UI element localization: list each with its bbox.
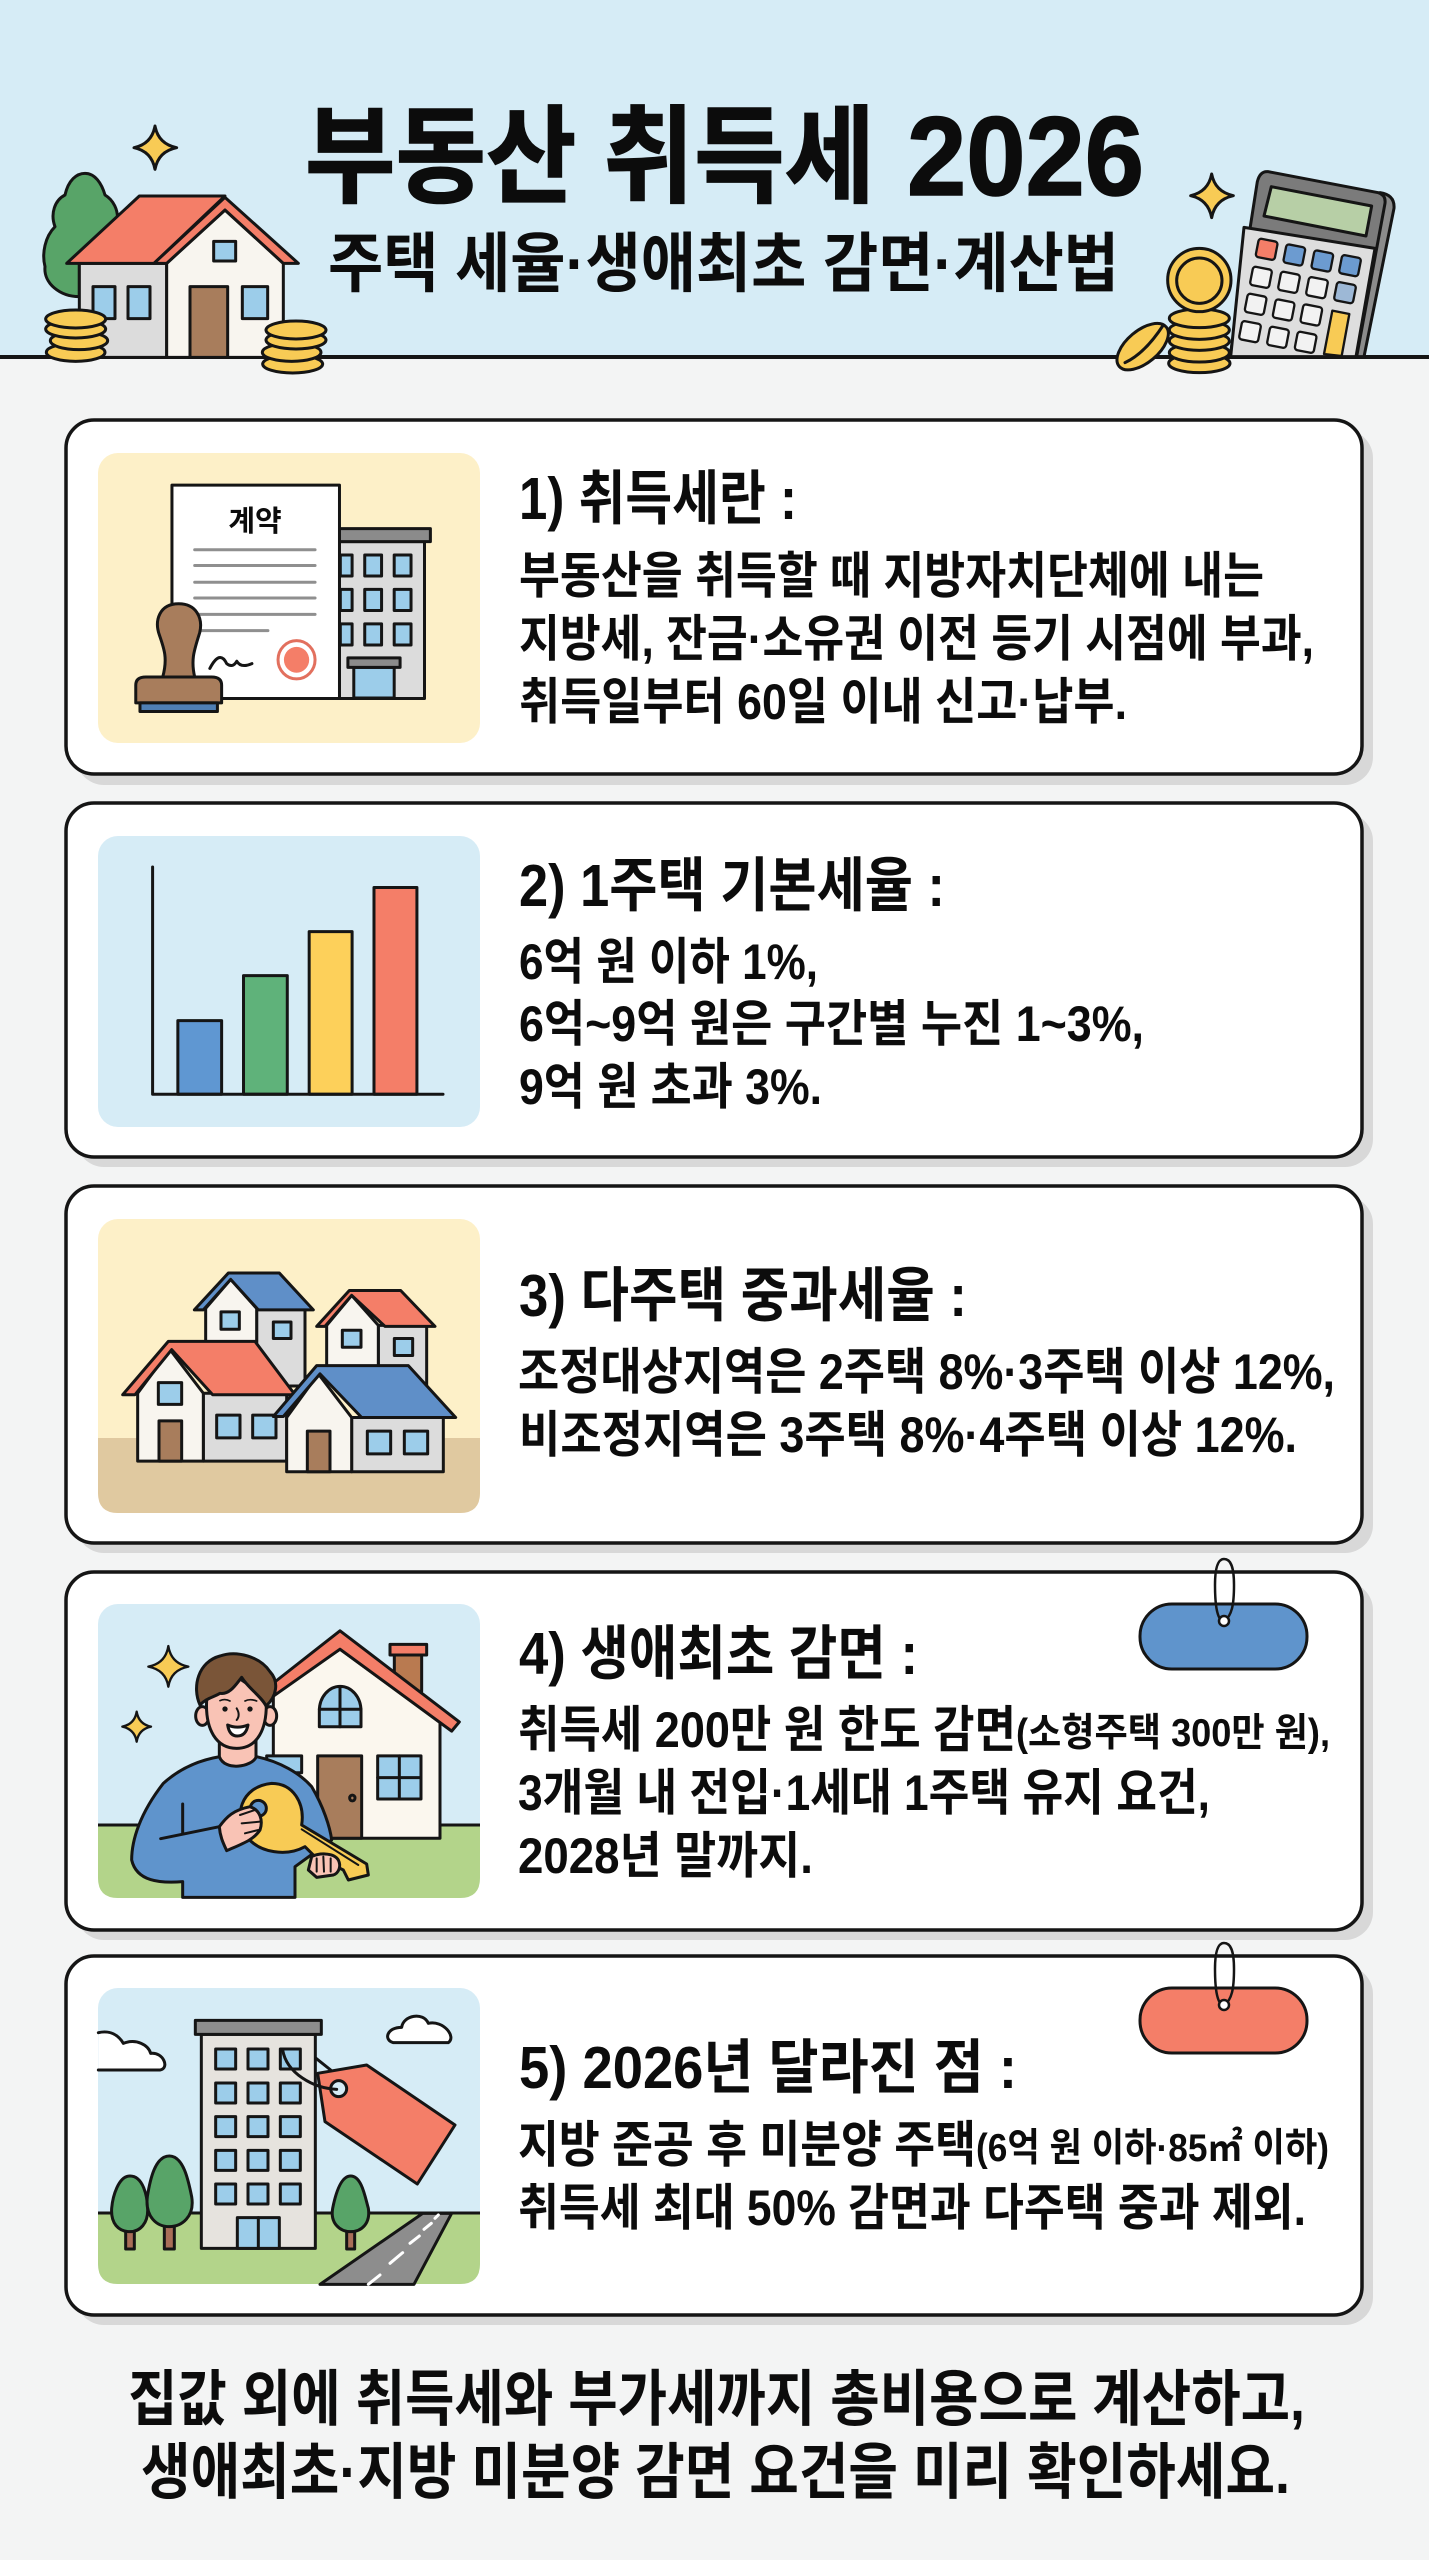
heading: card 4: 4) 생애최초 감면 :	[519, 1621, 918, 1687]
icon: red tag	[1140, 1943, 1307, 2053]
illustration: person with key and house	[98, 1604, 480, 1898]
footer message	[128, 2365, 1305, 2506]
illustration: contract and building	[98, 453, 480, 743]
icon: sparkle right	[1191, 174, 1233, 218]
text: card 2	[519, 934, 1144, 1115]
footer message: 집값 외에 취득세와 부가세까지 총비용으로 계산하고,	[128, 2365, 1305, 2433]
text: card 2: 6억 원 이하 1%,	[519, 934, 818, 990]
text: card 3: 비조정지역은 3주택 8%·4주택 이상 12%.	[519, 1407, 1297, 1463]
heading: card 5: 5) 2026년 달라진 점 :	[519, 2035, 1017, 2101]
figure: person holding key	[122, 1646, 368, 1897]
title	[305, 94, 1144, 219]
panel: card 4	[66, 1559, 1373, 1940]
bar chart	[98, 836, 480, 1127]
illustration: multiple houses	[98, 1219, 480, 1513]
icon: coins right	[262, 321, 326, 373]
text: card 5: 지방 준공 후 미분양 주택	[518, 2117, 976, 2173]
icon: house	[67, 196, 298, 357]
text: card 3: 조정대상지역은 2주택 8%·3주택 이상 12%,	[518, 1344, 1335, 1400]
text: card 4: 2028년 말까지.	[518, 1828, 813, 1884]
header band	[0, 0, 1429, 359]
text: card 4: 취득세 200만 원 한도 감면	[518, 1702, 1016, 1758]
panel: card 2	[66, 803, 1373, 1167]
subtitle: 주택 세율·생애최초 감면·계산법	[328, 227, 1119, 300]
text: card 2: 9억 원 초과 3%.	[519, 1059, 822, 1115]
text: card 1: 지방세, 잔금·소유권 이전 등기 시점에 부과,	[519, 611, 1314, 667]
illustration: building with price tag	[98, 1988, 480, 2284]
icon: coins left	[46, 310, 108, 361]
text: card 5: (6억 원 이하·85㎡ 이하)	[976, 2127, 1329, 2170]
heading: card 2: 2) 1주택 기본세율 :	[519, 853, 945, 919]
heading: card 3: 3) 다주택 중과세율 :	[519, 1263, 967, 1329]
text: card 2: 6억~9억 원은 구간별 누진 1~3%,	[519, 996, 1144, 1052]
icon: coin stack	[1168, 248, 1231, 373]
title: 2026	[907, 94, 1144, 219]
icon: leaning coin	[1109, 315, 1176, 379]
text: card 1	[519, 548, 1314, 730]
icon: calculator with coins	[1109, 172, 1394, 379]
panel: card 5	[66, 1943, 1373, 2325]
text: card 3	[518, 1344, 1335, 1463]
icon: calculator	[1230, 172, 1394, 357]
icon: sparkle left	[134, 126, 177, 169]
icon: tree	[44, 173, 117, 297]
panel: card 3	[66, 1186, 1373, 1553]
icon: blue tag	[1140, 1559, 1307, 1669]
icon: house with tree and coins	[44, 126, 326, 373]
text: card 4: 3개월 내 전입·1세대 1주택 유지 요건,	[518, 1765, 1210, 1821]
footer message: 생애최초·지방 미분양 감면 요건을 미리 확인하세요.	[141, 2438, 1290, 2506]
text: card 1: 부동산을 취득할 때 지방자치단체에 내는	[519, 548, 1264, 604]
text: card 5	[518, 2117, 1329, 2236]
text: card 5: 취득세 최대 50% 감면과 다주택 중과 제외.	[518, 2180, 1306, 2236]
title: 부동산 취득세	[305, 99, 875, 217]
text: card 4	[518, 1702, 1330, 1884]
heading: card 1: 1) 취득세란 :	[519, 466, 797, 532]
text: card 4: (소형주택 300만 원),	[1016, 1712, 1330, 1755]
panel: card 1	[66, 420, 1373, 785]
text: card 1: 취득일부터 60일 이내 신고·납부.	[519, 674, 1127, 730]
label: contract: 계약	[228, 505, 282, 538]
